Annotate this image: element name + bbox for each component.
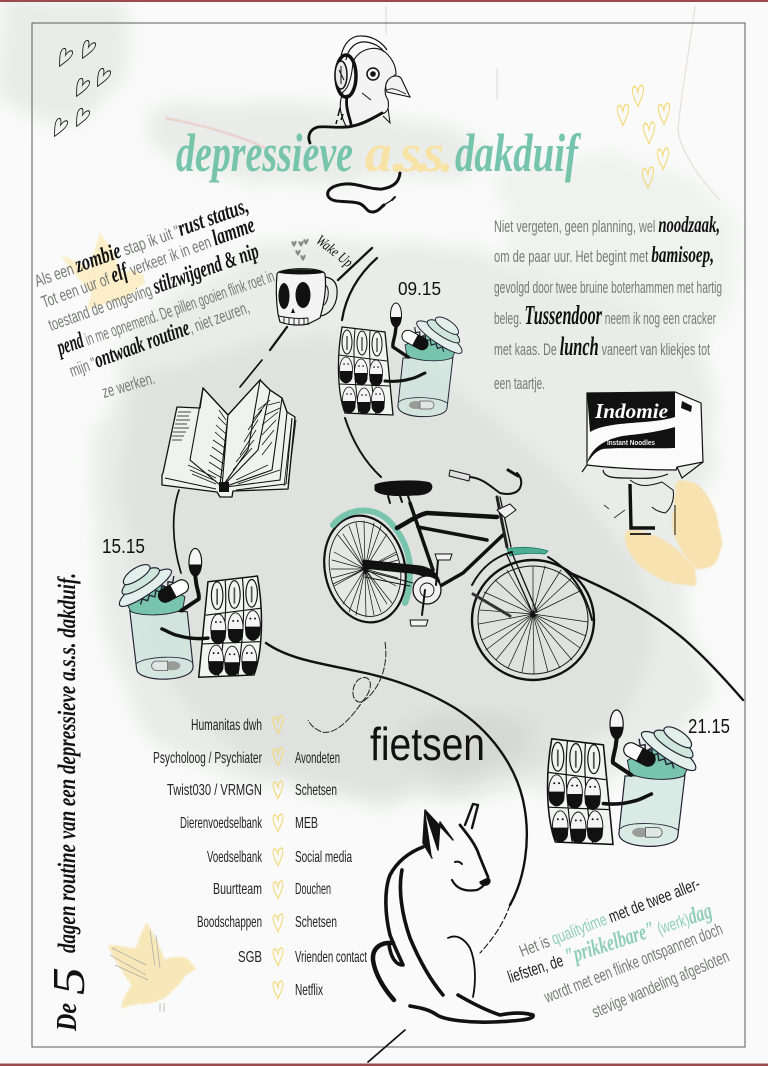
list: right activities: Schetsen <box>295 782 337 799</box>
icon: Indomie noodle figure: Indomie <box>594 399 668 423</box>
list: right activities: Douchen <box>295 881 331 898</box>
list: left activities: Humanitas dwh <box>191 717 262 734</box>
timeline path lines <box>174 248 743 1062</box>
front wheel <box>472 560 594 680</box>
text block: morning routine: Als een zombie stap ik uit "rust status, <box>30 193 252 292</box>
list: left activities <box>153 717 263 966</box>
list: right activities: Avondeten <box>295 750 340 767</box>
icon: dog <box>373 804 533 1022</box>
vertical heading: De <box>52 1003 83 1032</box>
handlebar <box>470 473 521 494</box>
label: wake up with small hearts: Wake Up <box>313 233 356 271</box>
text block: morning routine: ze werken. <box>100 369 157 402</box>
text block: food: een taartje. <box>494 374 545 393</box>
text block: morning routine: toestand de omgeving stilzwijgend & nip <box>44 238 262 336</box>
watercolour wash background <box>0 0 739 802</box>
list: left activities: SGB <box>238 949 262 966</box>
icon: butterfly behind noodle figure <box>626 480 722 586</box>
list: left activities: Voedselbank <box>207 849 263 866</box>
pill card and jar 15.15 <box>107 548 261 679</box>
list: heart bullets <box>273 716 283 999</box>
text block: morning routine: mijn "ontwaak routine, niet zeuren, <box>65 293 252 382</box>
list: left activities: Psycholoog / Psychiater <box>153 750 262 767</box>
vertical heading: dagen routine van een depressieve a.s.s. dakduif. <box>54 573 81 953</box>
vertical heading: 5 <box>43 967 94 995</box>
title: . <box>416 123 430 183</box>
text block: evening walk <box>504 874 732 1022</box>
bird wing stripes <box>110 930 164 1012</box>
icon: Indomie noodle figure <box>582 392 703 535</box>
rear fender <box>333 511 410 603</box>
pill card and jar 21.15 <box>548 710 709 846</box>
heading: fietsen: fietsen <box>370 718 485 770</box>
icon: open book <box>162 380 296 497</box>
list: right activities <box>295 750 367 999</box>
title <box>176 123 582 183</box>
text block: food: Niet vergeten, geen planning, wel noodzaak, <box>494 212 720 237</box>
yellow bird behind left text <box>62 233 146 310</box>
chain guard <box>363 560 440 590</box>
icon: skull mug <box>276 269 337 325</box>
list: right activities: MEB <box>295 815 318 832</box>
label: wake up with small hearts <box>291 233 356 271</box>
title: a <box>365 123 392 183</box>
icon group: yellow hearts <box>617 85 670 188</box>
list: right activities: Social media <box>295 849 352 866</box>
cable under title with jack <box>328 173 400 212</box>
yellow bird lower left <box>108 923 195 1008</box>
text block: food <box>494 212 722 393</box>
saddle <box>375 481 432 495</box>
text block: morning routine <box>30 193 277 402</box>
time label: 21.15 <box>688 716 730 738</box>
text block: evening walk: Het is qualitytime met de twee aller- <box>517 874 703 961</box>
text block: morning routine: Tot een uur of elf verkeer ik in een lamme <box>37 212 258 313</box>
front fender <box>507 547 548 556</box>
text block: food: met kaas. De lunch vaneert van kliekjes tot <box>494 332 710 361</box>
list: left activities: Boodschappen <box>197 914 262 931</box>
pill card and jar 09.15 <box>338 303 473 417</box>
list: left activities: Dierenvoedselbank <box>180 815 263 832</box>
list: right activities: Vrienden contact <box>295 949 367 966</box>
icon: bicycle <box>314 470 594 680</box>
text block: morning routine: pend in me opnemend. De pillen gooien flink roet in <box>52 262 277 360</box>
text block: evening walk: liefsten, de "prikkelbare" (werk)dag <box>504 898 715 988</box>
cable <box>309 96 382 143</box>
title: depressieve <box>176 123 353 183</box>
icon group: black hearts <box>50 39 112 139</box>
time label: 09.15 <box>398 279 441 299</box>
list: left activities: Twist030 / VRMGN <box>167 782 262 799</box>
icon: bird with headphones <box>309 36 410 143</box>
title: s <box>422 123 444 183</box>
rear wheel <box>314 507 416 631</box>
list: right activities: Schetsen <box>295 914 337 931</box>
text block: food: om de paar uur. Het begint met bamisoep, <box>494 242 714 267</box>
decorative dashed loop <box>308 642 386 732</box>
time label: 15.15 <box>102 536 145 558</box>
list: right activities: Netflix <box>295 982 323 999</box>
title: s <box>399 123 421 183</box>
icon: Indomie noodle figure: Instant Noodles <box>607 438 655 447</box>
title: . <box>440 123 454 183</box>
list: left activities: Buurtteam <box>213 881 262 898</box>
title: . <box>392 123 406 183</box>
title: dakduif <box>455 123 582 183</box>
vertical heading <box>43 573 94 1032</box>
frame tubes <box>397 513 497 528</box>
